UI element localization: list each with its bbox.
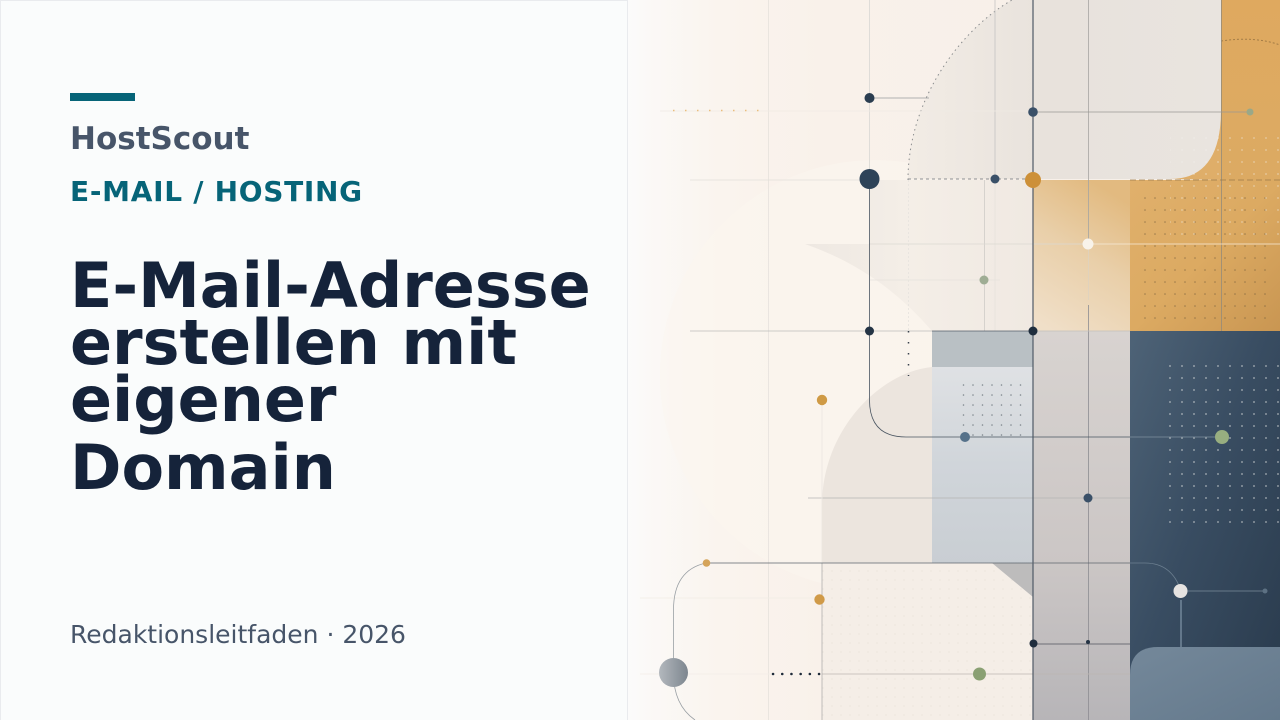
node: dark top: [864, 93, 874, 103]
node: navy join: [1028, 326, 1038, 336]
shape: top light rounded block: [908, 0, 1221, 180]
shape: beige arc block: [822, 367, 932, 563]
title: [70, 249, 591, 504]
pattern: ice dots: [962, 376, 1026, 436]
network nodes: [659, 93, 1268, 687]
shape: gold corner fill: [1170, 110, 1221, 180]
pattern: dark block dots: [1166, 360, 1280, 532]
dotted rows: [673, 110, 908, 674]
node: navy column: [1084, 494, 1092, 502]
dots: dark row: [773, 673, 822, 675]
dots: amber row: [673, 110, 768, 112]
arc: dotted outline: [908, 0, 1012, 180]
title: Domain: [70, 431, 336, 504]
node: green lower: [973, 668, 986, 680]
node: navy upper: [1028, 107, 1038, 117]
panel: middle column: [1033, 331, 1130, 720]
node: navy small: [865, 326, 874, 336]
pattern: bottom fine dots: [822, 566, 1033, 720]
node: small teal: [1262, 588, 1268, 594]
panel: left text card: [0, 0, 628, 720]
panel: gold right strip: [1221, 0, 1280, 180]
node: white: [1082, 238, 1094, 250]
title: E-Mail-Adresse: [70, 249, 591, 322]
shape: grey wedge: [992, 563, 1033, 597]
accent bar: [70, 93, 135, 101]
node: gold lower: [814, 594, 825, 605]
grid lines: [590, 0, 1280, 720]
panel: gold dotted block: [1130, 180, 1280, 331]
node: grey sphere: [659, 658, 688, 687]
node: white lower: [1174, 584, 1188, 598]
panel: light gold block: [1033, 180, 1130, 331]
node: green right: [1215, 430, 1229, 444]
brand name: HostScout: [70, 121, 249, 157]
node: small navy on dashed line: [990, 174, 1000, 184]
node: slate: [960, 432, 970, 442]
title: eigener: [70, 363, 336, 436]
category label: E-MAIL / HOSTING: [70, 175, 363, 208]
panel: steel band: [932, 331, 1033, 367]
dots: vertical small: [908, 331, 910, 376]
pattern: gold dots: [1136, 190, 1266, 322]
panel: slate rounded block: [1130, 647, 1280, 720]
pattern: gold light dots: [1170, 130, 1280, 240]
panel: dark block: [1130, 331, 1280, 720]
subtitle: Redaktionsleitfaden · 2026: [70, 620, 406, 649]
node: gold centre: [1025, 172, 1041, 188]
node: large navy: [860, 169, 880, 189]
node: gold small: [703, 559, 710, 567]
panel: bottom beige block: [822, 563, 1033, 720]
node: sage mid: [980, 276, 988, 284]
shape: faint large disc: [660, 160, 1090, 590]
panel: ice block: [932, 367, 1033, 563]
shape: pale area above centre: [805, 180, 1033, 331]
node: tiny dark: [1086, 640, 1090, 644]
title: erstellen mit: [70, 306, 517, 379]
curve: upper right dashed arc: [1221, 39, 1280, 45]
node: gold left: [817, 395, 827, 405]
node: sage upper right: [1246, 108, 1254, 116]
node: dark lower: [1030, 640, 1038, 648]
panel: cream background: [628, 0, 1280, 720]
